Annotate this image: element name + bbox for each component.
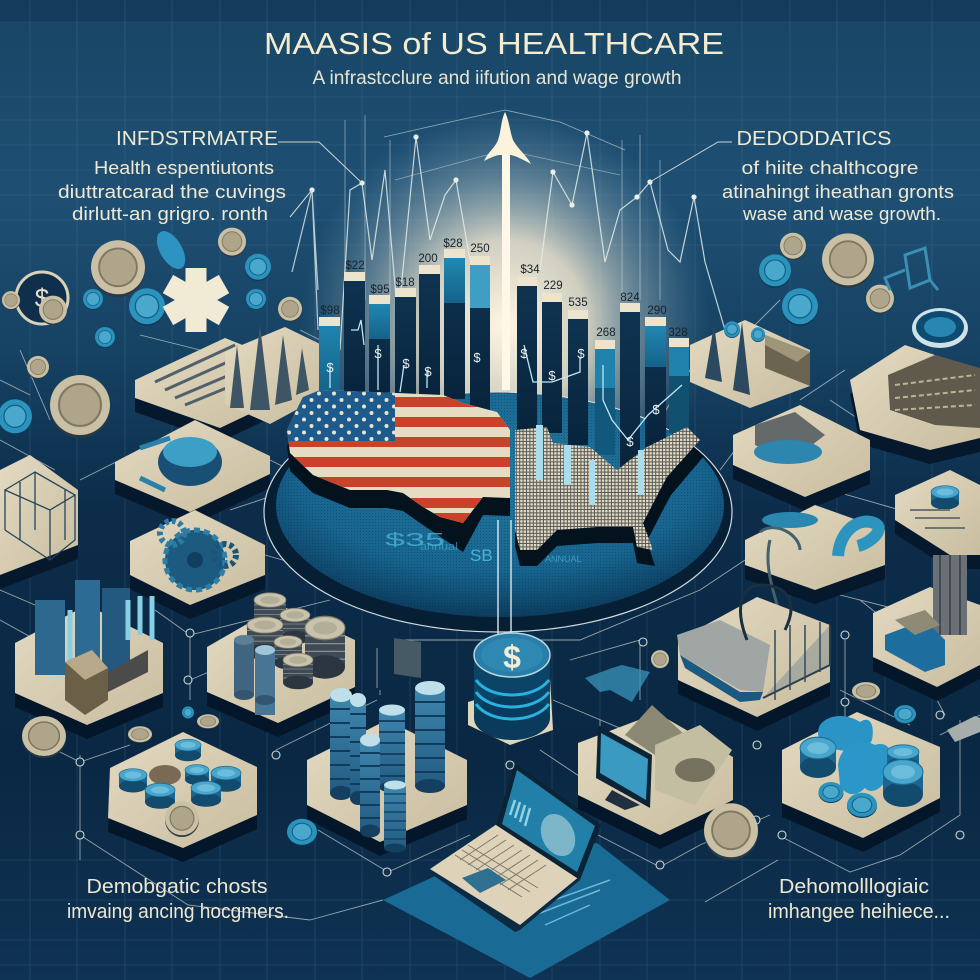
- connector nodes: [76, 629, 964, 876]
- dish labels: $35: [385, 530, 445, 550]
- text block: demographics: wase and wase growth.: [742, 204, 941, 224]
- text block: infrastructure: dirlutt-an grigro. ronth: [72, 204, 268, 224]
- laptop: [430, 763, 601, 932]
- bar value labels: $22: [345, 260, 365, 272]
- panel: brick building: [850, 345, 980, 464]
- title: MAASIS of US HEALTHCARE: [264, 26, 724, 61]
- left bars: [319, 249, 490, 411]
- icon: monitor: [596, 725, 652, 808]
- text block: demographics: atinahingt iheathan gronts: [722, 182, 954, 202]
- bar value labels: $28: [443, 238, 463, 250]
- icon: blue badge: [912, 308, 968, 348]
- small document icon: [394, 638, 421, 678]
- heading left: INFDSTRMATRE: [116, 127, 278, 150]
- right bars: [517, 277, 689, 473]
- text: $: [652, 402, 660, 417]
- text: $: [626, 434, 634, 449]
- callout line right: [650, 142, 732, 182]
- bar value labels: 824: [620, 292, 640, 304]
- text: $: [520, 346, 528, 361]
- centre dollar coin stack: $: [503, 639, 521, 675]
- bar value labels: 250: [470, 243, 490, 255]
- panel: far right notes: [895, 470, 980, 569]
- line chart traces: [292, 110, 725, 350]
- icon: chair: [885, 248, 938, 290]
- panel: glass towers: [15, 580, 163, 739]
- caption bottom left: imvaing ancing hocgmers.: [67, 901, 289, 923]
- icon: asterisk: [168, 268, 224, 332]
- dish: [276, 393, 724, 617]
- panel: pill box: [115, 420, 270, 526]
- key pad icon: [947, 716, 980, 742]
- panel: blue coins: [108, 732, 257, 862]
- bar value labels: 268: [596, 327, 616, 339]
- heading right: DEDODDATICS: [736, 127, 892, 150]
- ship panel: [677, 585, 830, 731]
- panel: silver coin stacks: [207, 593, 355, 737]
- text block: infrastructure: [58, 127, 286, 224]
- text: $: [577, 346, 585, 361]
- panel: gears: [130, 510, 265, 619]
- bar chart: [319, 238, 689, 473]
- icon: dollar coin: [16, 272, 68, 324]
- caption bottom left: [67, 876, 289, 923]
- panel: wireframe: [0, 455, 78, 589]
- caption bottom right: [768, 876, 950, 923]
- outer dish ring: [264, 392, 732, 632]
- connector network: [0, 300, 980, 920]
- text: $: [548, 368, 556, 383]
- panel: towers right: [690, 320, 810, 408]
- panel: newspaper: [135, 338, 300, 442]
- panel: stethoscope: [745, 505, 885, 640]
- centre dollar coin stack: [468, 633, 553, 745]
- caption bottom left: Demobgatic chosts: [86, 876, 268, 898]
- caption bottom right: imhangee heihiece...: [768, 901, 950, 923]
- text: $: [473, 350, 481, 365]
- dish labels: SB: [470, 546, 493, 565]
- decorative token coins left: [22, 706, 317, 846]
- chart nodes: [309, 130, 697, 208]
- callout line left: [278, 142, 362, 217]
- lower panels left: [15, 580, 467, 862]
- bar value labels: 229: [543, 280, 563, 292]
- hexagon panels left upper: [0, 325, 322, 619]
- building panel lower right: [873, 555, 980, 701]
- text: $: [424, 364, 432, 379]
- hexagon panels right upper: [690, 320, 980, 640]
- icon: peppers: [818, 716, 892, 794]
- subtitle: A infrastcclure and iifution and wage growth: [312, 67, 682, 89]
- dish labels: annual: [420, 541, 458, 553]
- bar value labels: 328: [668, 327, 688, 339]
- central glow: [300, 110, 710, 540]
- text: $: [326, 360, 334, 375]
- panel: glass case: [733, 405, 870, 511]
- bar value labels: $18: [395, 277, 415, 289]
- dollar markers on bars: [330, 320, 682, 440]
- map: right half: [515, 427, 704, 566]
- text block: infrastructure: Health espentiutonts: [94, 158, 274, 178]
- pepper and coins panel: [782, 712, 940, 852]
- monitor and money panel: [578, 705, 733, 849]
- light drips over map: [536, 425, 644, 505]
- drop lines to coin: [498, 520, 511, 640]
- icon: dollar coin: $: [35, 283, 50, 313]
- bar value labels: $34: [520, 264, 540, 276]
- glass shard icon: [585, 665, 650, 702]
- icon: cash: [625, 705, 732, 805]
- text block: demographics: of hiite chalthcogre: [742, 158, 918, 178]
- bar value labels: 535: [568, 297, 588, 309]
- text: $: [402, 356, 410, 371]
- token coins right lower: [651, 650, 916, 860]
- blue paper: [383, 843, 670, 978]
- bar value labels: [320, 238, 688, 339]
- caption bottom right: Dehomolllogiaic: [779, 876, 929, 898]
- dish labels: ANNUAL: [545, 554, 582, 564]
- bar value labels: $95: [370, 284, 390, 296]
- panel: tall blue stacks: [307, 681, 467, 856]
- text block: infrastructure: diuttratcarad the cuvings: [58, 182, 286, 202]
- bar value labels: 200: [418, 253, 438, 265]
- tokens: upper right cluster: [724, 233, 968, 348]
- rising arrow: [484, 112, 531, 390]
- bar value labels: $98: [320, 305, 340, 317]
- bar value labels: 290: [647, 305, 667, 317]
- tokens: upper left cluster: [0, 226, 302, 438]
- text: $: [374, 346, 382, 361]
- dish labels: [385, 530, 582, 565]
- text block: demographics: [722, 127, 954, 224]
- panel: spires: [225, 325, 322, 424]
- map: flag half: [280, 385, 515, 552]
